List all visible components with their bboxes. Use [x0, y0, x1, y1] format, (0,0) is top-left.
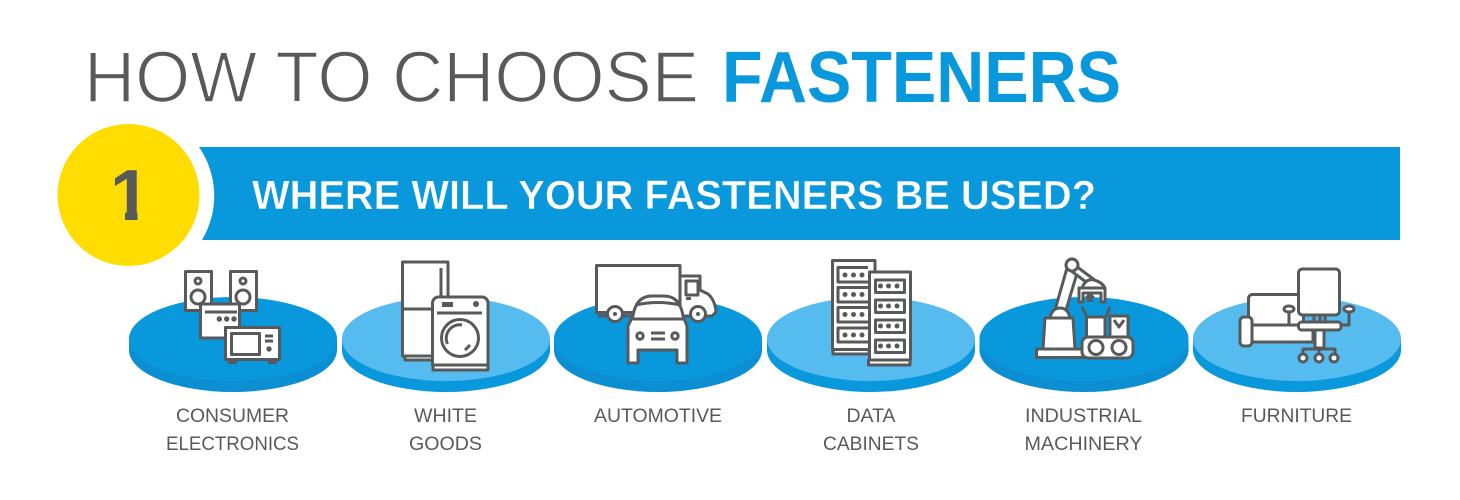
icon: truck and car	[596, 266, 716, 363]
panel: white goods	[342, 262, 550, 455]
panel: industrial machinery	[980, 259, 1188, 455]
label: CONSUMER	[176, 406, 289, 427]
label: ELECTRONICS	[166, 434, 299, 455]
panel: automotive	[554, 266, 762, 427]
title: FASTENERS	[722, 38, 1121, 118]
label: AUTOMOTIVE	[594, 406, 722, 427]
platform disc	[1193, 297, 1401, 392]
banner: section heading	[199, 147, 1400, 240]
title	[84, 38, 1121, 118]
icon: fridge and washing machine	[402, 262, 488, 370]
icon: server racks	[832, 260, 910, 365]
label	[823, 406, 919, 455]
label: WHITE	[414, 406, 477, 427]
label: DATA	[846, 406, 896, 427]
panel: consumer electronics	[129, 272, 337, 455]
platform disc	[767, 297, 975, 392]
icon: speakers, amplifier and microwave	[186, 272, 280, 364]
platform disc	[980, 297, 1188, 392]
icon: robot arm and tracked machine	[1036, 259, 1133, 358]
platform disc	[554, 297, 762, 392]
platform disc	[342, 297, 550, 392]
label	[1024, 406, 1143, 455]
title: HOW TO CHOOSE	[84, 38, 699, 118]
label	[166, 406, 299, 455]
banner: section heading: WHERE WILL YOUR FASTENERS BE USED?	[252, 172, 1096, 218]
label: MACHINERY	[1024, 434, 1143, 455]
label: INDUSTRIAL	[1025, 406, 1142, 427]
panel: data cabinets	[767, 260, 975, 455]
platform disc	[129, 297, 337, 392]
label: CABINETS	[823, 434, 919, 455]
icon: sofa and office chair	[1240, 269, 1354, 362]
label	[409, 406, 482, 455]
label: FURNITURE	[1241, 406, 1352, 427]
label: GOODS	[409, 434, 482, 455]
step number badge: 1	[110, 156, 150, 236]
step number badge	[58, 124, 200, 266]
panel: furniture	[1193, 269, 1401, 427]
